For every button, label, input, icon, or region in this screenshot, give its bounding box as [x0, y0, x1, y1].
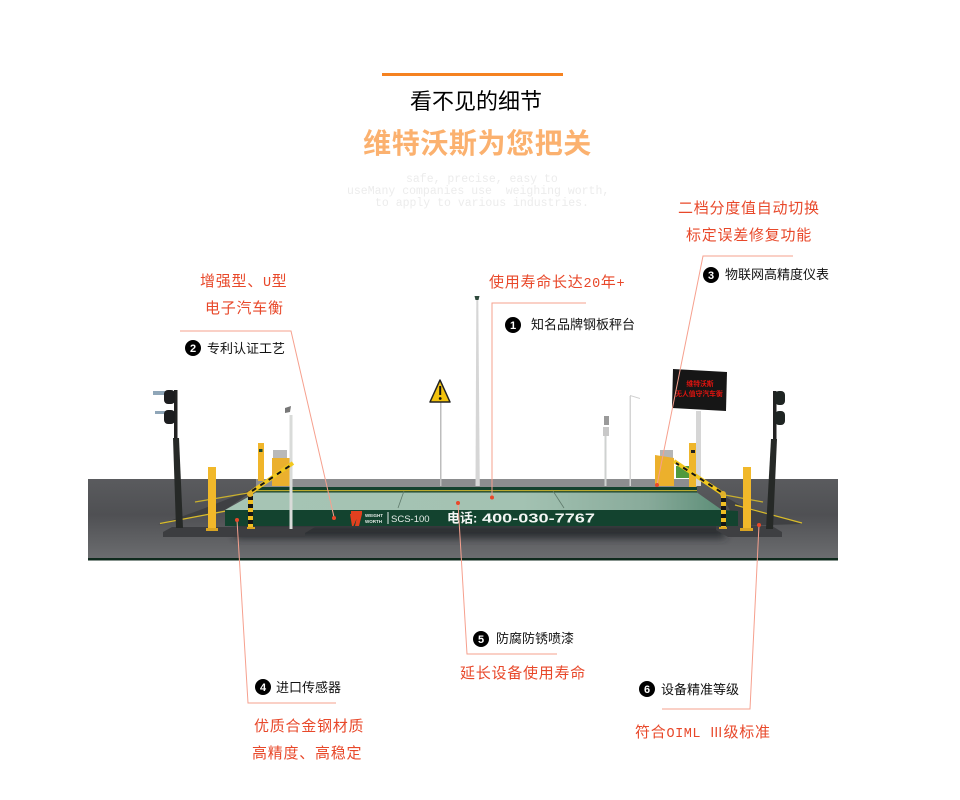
callout 2: patented process — [180, 273, 336, 520]
right ramp — [722, 495, 802, 526]
callout 6: accuracy class: 设备精准等级 — [661, 682, 739, 697]
callout 2: patented process: 专利认证工艺 — [207, 341, 285, 356]
callout 4: imported sensor: 高精度、高稳定 — [252, 745, 362, 763]
right traffic light — [766, 391, 785, 529]
callout 2: patented process: 增强型、U型 — [200, 273, 287, 291]
callout 3: IoT indicator: 3 — [708, 270, 714, 282]
platform label: 400-030-7767 — [482, 510, 595, 526]
callout 4: imported sensor: 进口传感器 — [276, 680, 341, 695]
icon: warning triangle — [430, 380, 450, 402]
right barrier — [674, 461, 727, 529]
title block: 维特沃斯为您把关 — [363, 128, 592, 159]
callout 5: anti-corrosion — [456, 501, 586, 683]
callout 4: imported sensor: 优质合金钢材质 — [254, 718, 364, 736]
callout 3: IoT indicator: 二档分度值自动切换 — [678, 200, 820, 218]
left traffic light — [153, 390, 183, 528]
left ramp — [158, 487, 258, 525]
callout 3: IoT indicator: 标定误差修复功能 — [686, 226, 812, 245]
platform label — [350, 510, 595, 526]
ground — [88, 479, 838, 560]
callout 1: platform: 使用寿命长达20年+ — [489, 273, 625, 292]
english intro text — [347, 173, 609, 210]
platform shadow — [235, 524, 725, 538]
right cabinet and gate — [655, 411, 701, 487]
platform label: SCS-100 — [391, 514, 430, 525]
left base plate — [163, 527, 315, 537]
LED display: 维特沃斯 — [686, 379, 714, 388]
callout 6: accuracy class — [635, 523, 771, 742]
title block: 看不见的细节 — [410, 89, 542, 114]
rear poles and sign — [440, 296, 640, 486]
english intro text: safe, precise, easy to — [406, 173, 558, 186]
english intro text: to apply to various industries. — [375, 197, 589, 210]
callout 3: IoT indicator: 物联网高精度仪表 — [725, 267, 829, 282]
callout 1: platform: 知名品牌钢板秤台 — [531, 317, 635, 332]
callout 5: anti-corrosion: 延长设备使用寿命 — [460, 664, 586, 683]
scene: truck scale — [88, 296, 838, 560]
english intro text: useMany companies use weighing worth, — [347, 185, 609, 198]
callout 1: platform: 1 — [510, 320, 516, 332]
left barrier — [247, 463, 293, 529]
left cabinet — [258, 443, 292, 486]
platform label: WORTH — [365, 519, 382, 524]
callout 2: patented process: 2 — [190, 343, 196, 355]
lamp post left — [285, 406, 292, 529]
right base plate — [716, 526, 782, 537]
LED display — [672, 369, 727, 411]
callout 2: patented process: 电子汽车衡 — [205, 300, 284, 318]
callout 6: accuracy class: 符合OIML Ⅲ级标准 — [635, 724, 771, 742]
callout 4: imported sensor — [235, 518, 364, 763]
title block — [363, 73, 592, 159]
callout 4: imported sensor: 4 — [260, 682, 267, 694]
weighbridge platform — [225, 487, 738, 526]
callout 5: anti-corrosion: 5 — [478, 634, 484, 646]
yellow posts — [206, 467, 753, 531]
callout 3: IoT indicator — [655, 200, 829, 487]
callout 6: accuracy class: 6 — [644, 684, 650, 696]
LED display: 无人值守汽车衡 — [675, 389, 723, 398]
platform label: 电话: — [447, 510, 477, 526]
callout 5: anti-corrosion: 防腐防锈喷漆 — [496, 631, 574, 646]
platform label: WEIGHT — [365, 513, 383, 518]
callout 1: platform — [489, 273, 635, 500]
